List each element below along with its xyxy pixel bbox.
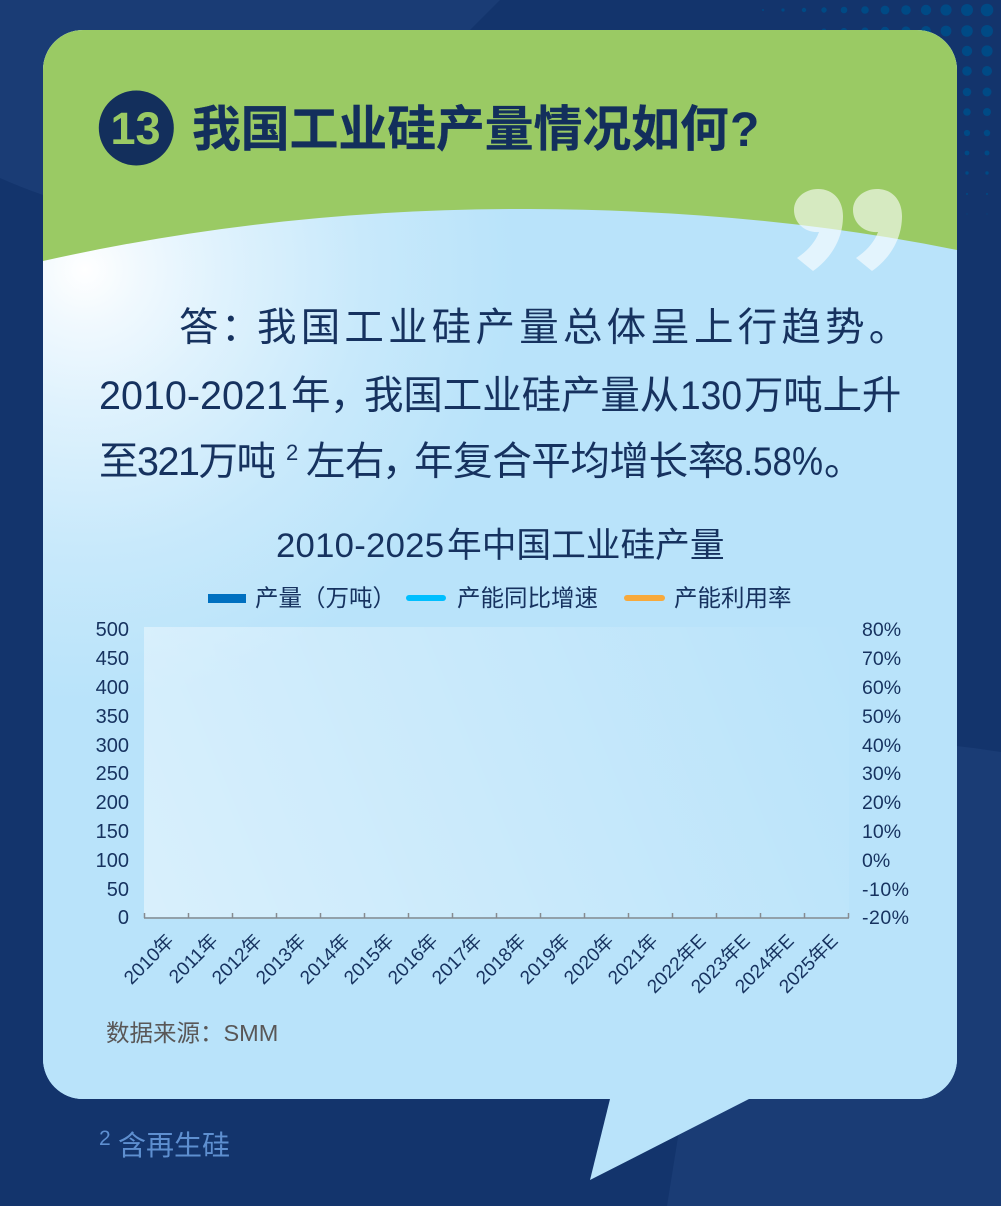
title: ? <box>730 104 759 157</box>
answer text: 答 <box>179 306 218 350</box>
x axis labels: 2013年 <box>252 930 311 989</box>
chart title: 年中国工业硅产量 <box>447 526 725 565</box>
left axis labels: 350 <box>96 706 129 728</box>
answer text: 年复合平均增长率 <box>414 440 727 484</box>
title: 我国工业硅产量情况如何 <box>192 103 729 157</box>
x axis labels: 2010年 <box>120 930 179 989</box>
answer text: 130 <box>680 374 742 418</box>
right axis labels: 60% <box>862 677 901 699</box>
answer text: ， <box>382 440 422 484</box>
x axis labels: 2011年 <box>165 930 223 988</box>
answer text: 。 <box>824 440 864 484</box>
x axis labels: 2024年E <box>731 930 799 998</box>
right axis labels: 40% <box>862 735 901 757</box>
right axis labels: 70% <box>862 648 901 670</box>
footnote: 含再生硅 <box>118 1130 230 1161</box>
left axis labels: 450 <box>96 648 129 670</box>
answer text: 2010-2021 <box>99 374 288 418</box>
right axis labels: 20% <box>862 792 901 814</box>
x axis labels: 2012年 <box>208 930 267 989</box>
x axis labels <box>120 930 843 998</box>
right axis labels: 80% <box>862 619 901 641</box>
answer text: 左右 <box>306 440 384 484</box>
x axis labels: 2018年 <box>472 930 531 989</box>
answer text: ， <box>330 374 370 418</box>
data source: 数据来源：SMM <box>106 1020 278 1046</box>
x axis labels: 2019年 <box>516 930 575 989</box>
chart legend: 产能利用率 <box>674 585 792 611</box>
left axis labels: 400 <box>96 677 129 699</box>
answer text: 2 <box>286 440 298 465</box>
left axis labels: 100 <box>96 850 129 872</box>
x axis labels: 2022年E <box>643 930 711 998</box>
right axis labels <box>862 619 909 929</box>
right axis labels: 0% <box>862 850 890 872</box>
x axis labels: 2020年 <box>560 930 619 989</box>
right axis labels: 10% <box>862 821 901 843</box>
green header band <box>43 30 957 261</box>
number badge: 13 <box>110 103 161 154</box>
right axis labels: 50% <box>862 706 901 728</box>
left axis labels <box>96 619 129 929</box>
answer text: 万吨上升 <box>744 374 901 418</box>
answer text: 我国工业硅产量总体呈上行趋势。 <box>257 306 912 350</box>
right axis labels: -10% <box>862 879 909 901</box>
answer text: ： <box>221 306 260 350</box>
x axis labels: 2023年E <box>687 930 755 998</box>
answer text <box>99 306 912 484</box>
footnote: 2 <box>99 1127 111 1150</box>
chart legend: 产量（万吨） <box>255 585 396 611</box>
right axis labels: -20% <box>862 907 909 929</box>
x axis labels: 2014年 <box>296 930 355 989</box>
chart plot area <box>144 627 849 918</box>
left axis labels: 200 <box>96 792 129 814</box>
x axis labels: 2016年 <box>384 930 443 989</box>
chart title <box>276 526 725 565</box>
left axis labels: 50 <box>107 879 129 901</box>
x axis labels: 2015年 <box>340 930 399 989</box>
x axis labels: 2017年 <box>428 930 487 989</box>
answer text: 至321万吨 <box>99 440 276 484</box>
number badge <box>99 90 174 166</box>
chart legend: 产能同比增速 <box>457 585 598 611</box>
answer text: 8.58% <box>724 440 823 484</box>
x axis labels: 2025年E <box>775 930 843 998</box>
x axis labels: 2021年 <box>604 930 663 989</box>
answer text: 年 <box>291 374 330 418</box>
answer text: 我国工业硅产量从 <box>364 374 679 418</box>
left axis labels: 300 <box>96 735 129 757</box>
left axis labels: 0 <box>118 907 129 929</box>
icon: quotation mark <box>794 189 902 271</box>
halftone dot pattern <box>762 4 993 215</box>
left axis labels: 250 <box>96 763 129 785</box>
left axis labels: 500 <box>96 619 129 641</box>
chart legend <box>208 585 792 611</box>
right axis labels: 30% <box>862 763 901 785</box>
chart title: 2010-2025 <box>276 527 444 565</box>
left axis labels: 150 <box>96 821 129 843</box>
